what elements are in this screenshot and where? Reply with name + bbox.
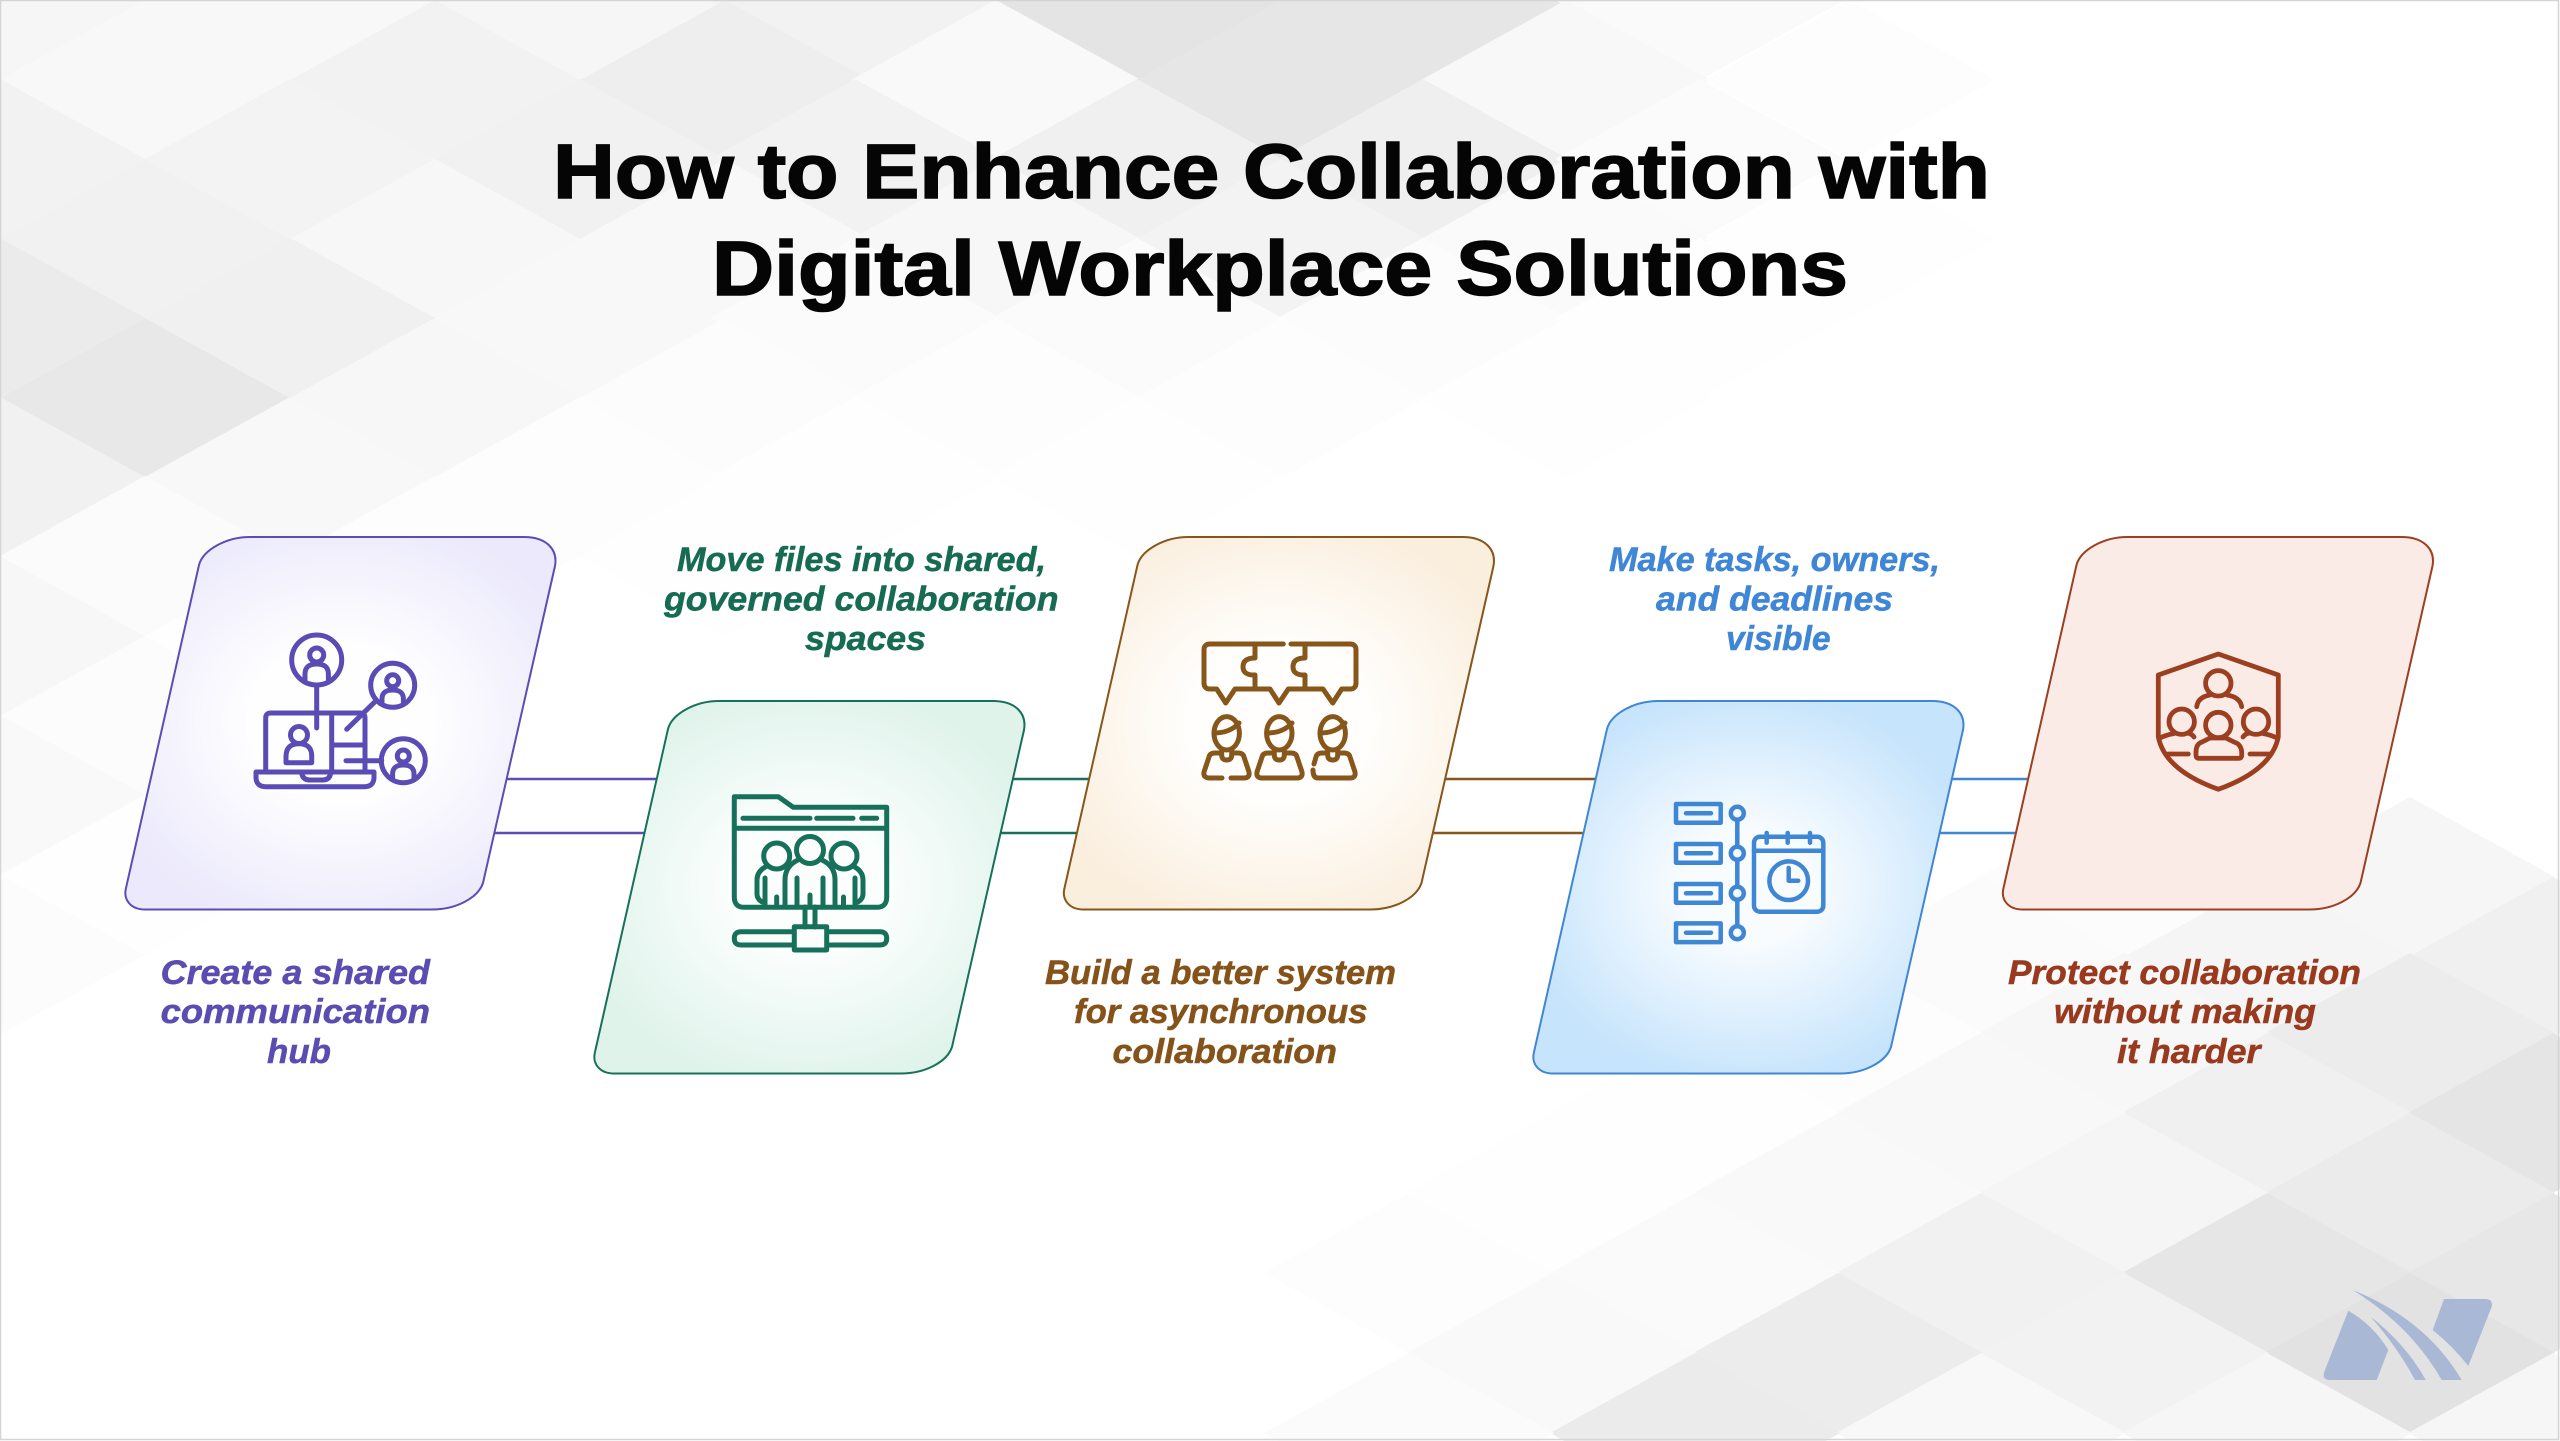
panel 2: shared governed spaces xyxy=(594,701,1024,1074)
label: build a better system: collaboration xyxy=(1112,1033,1337,1071)
label: create a shared communication hub: communication xyxy=(161,993,430,1031)
label: make tasks visible xyxy=(1609,541,1940,658)
card 3 xyxy=(1064,537,1494,910)
icon: laptop with connected people xyxy=(256,635,425,787)
label: protect collaboration: it harder xyxy=(2117,1033,2262,1071)
label: build a better system xyxy=(1045,954,1396,1071)
connector: purple xyxy=(430,779,720,833)
panel 3: asynchronous collaboration xyxy=(1064,537,1494,910)
label: protect collaboration: without making xyxy=(2054,993,2316,1031)
label: make tasks visible: and deadlines xyxy=(1656,580,1893,618)
icon: shared folder with people xyxy=(734,797,887,950)
label: move files into shared spaces: spaces xyxy=(805,620,926,658)
title: Digital Workplace Solutions xyxy=(712,226,1848,312)
title: How to Enhance Collaboration with xyxy=(553,129,1990,215)
card 2 xyxy=(594,701,1024,1074)
logo xyxy=(2324,1290,2492,1380)
title xyxy=(553,129,1990,312)
panel 1: shared communication hub xyxy=(125,537,555,910)
label: move files into shared spaces xyxy=(663,541,1058,658)
icon: puzzle speech bubbles and team xyxy=(1204,644,1356,778)
label: create a shared communication hub: Create a shared xyxy=(161,954,431,992)
label: create a shared communication hub xyxy=(161,954,431,1071)
connector: blue xyxy=(1840,779,2130,833)
label: protect collaboration xyxy=(2008,954,2361,1071)
connector: brown xyxy=(1370,779,1660,833)
card 1 xyxy=(125,537,555,910)
label: build a better system: for asynchronous xyxy=(1074,993,1368,1031)
panel 4: tasks, owners and deadlines xyxy=(1533,701,1963,1074)
panel 5: protect collaboration xyxy=(2003,537,2433,910)
icon: task timeline and calendar xyxy=(1676,804,1823,942)
label: create a shared communication hub: hub xyxy=(267,1033,331,1071)
label: move files into shared spaces: governed collaboration xyxy=(663,580,1058,618)
label: protect collaboration: Protect collaboration xyxy=(2008,954,2361,992)
label: make tasks visible: visible xyxy=(1726,620,1831,658)
connector: green xyxy=(900,779,1190,833)
label: build a better system: Build a better system xyxy=(1045,954,1396,992)
label: move files into shared spaces: Move files into shared, xyxy=(677,541,1046,579)
card 4 xyxy=(1533,701,1963,1074)
icon: shield with team xyxy=(2158,654,2278,789)
card 5 xyxy=(2003,537,2433,910)
label: make tasks visible: Make tasks, owners, xyxy=(1609,541,1940,579)
